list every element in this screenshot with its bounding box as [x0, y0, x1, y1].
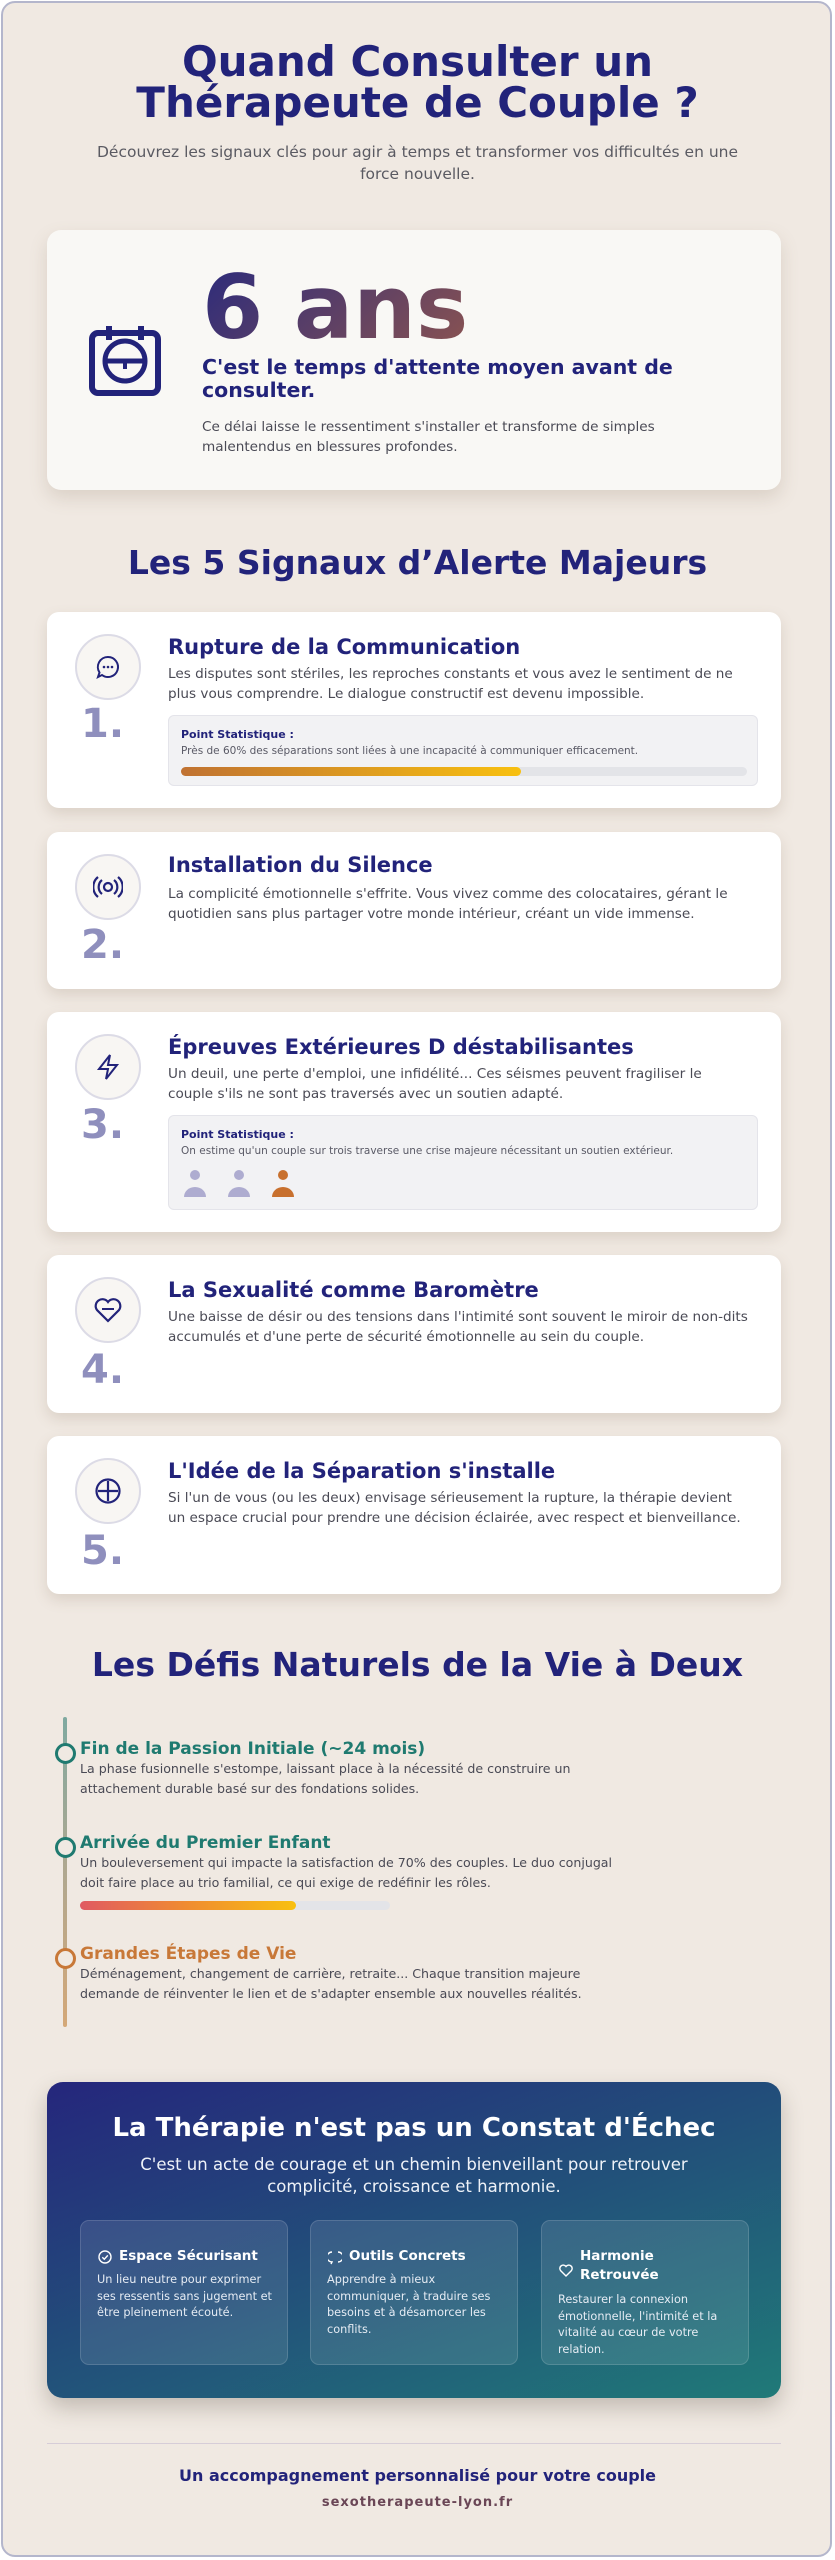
timeline item 1: La phase fusionnelle s'estompe, laissant place à la nécessité de construire un: [80, 1761, 571, 1776]
timeline item 1: [55, 1739, 571, 1796]
card: espace sécurisant: Espace Sécurisant: [119, 2248, 258, 2264]
panel: signal 1: Rupture de la Communication: [168, 635, 520, 659]
subtitle: Découvrez les signaux clés pour agir à temps et transformer vos difficultés en une: [97, 143, 738, 161]
card: outils concrets: conflits.: [327, 2322, 371, 2336]
panel: signal 1: 1.: [81, 701, 124, 747]
stat description: Ce délai laisse le ressentiment s'installer et transforme de simples: [202, 419, 655, 435]
timeline item 3: demande de réinventer le lien et de s'adapter ensemble aux nouvelles réalités.: [80, 1986, 582, 2000]
card: espace sécurisant: ses ressentis sans jugement et: [97, 2290, 272, 2302]
title: [136, 37, 699, 127]
panel: signal 5: [47, 1436, 781, 1594]
panel subtitle: C'est un acte de courage et un chemin bienveillant pour retrouver: [140, 2155, 688, 2174]
stat box with people: [168, 1115, 758, 1210]
card: outils concrets: Apprendre à mieux: [327, 2273, 435, 2286]
icon: lightning: [75, 1034, 141, 1100]
panel subtitle: complicité, croissance et harmonie.: [267, 2177, 561, 2196]
timeline item 1: Fin de la Passion Initiale (~24 mois): [80, 1739, 425, 1759]
panel: signal 3: couple s'ils ne sont pas traversés avec un soutien adapté.: [168, 1086, 563, 1102]
timeline item 1: attachement durable basé sur des fondations solides.: [80, 1780, 419, 1796]
panel: signal 3: 3.: [81, 1102, 124, 1148]
stat description: [202, 419, 655, 455]
card: espace sécurisant: Un lieu neutre pour exprimer: [97, 2273, 261, 2286]
stat box with people: Point Statistique :: [181, 1128, 294, 1141]
panel subtitle: [140, 2155, 688, 2196]
card: outils concrets: communiquer, à traduire ses: [327, 2290, 490, 2302]
card: outils concrets: besoins et à désamorcer les: [327, 2306, 486, 2319]
footer url: sexotherapeute-lyon.fr: [322, 2495, 513, 2510]
timeline item 3: [55, 1943, 582, 2000]
panel: signal 2: 2.: [81, 922, 124, 968]
panel: thérapie: [47, 2082, 781, 2398]
panel: signal 2: quotidien sans plus partager votre monde intérieur, créant un vide immense.: [168, 906, 695, 922]
card: harmonie retrouvée: [541, 2220, 749, 2365]
title: Quand Consulter un: [182, 37, 653, 86]
panel: signal 2: La complicité émotionnelle s'effrite. Vous vivez comme des colocataires, gérant le: [168, 886, 728, 902]
heading: 5 signaux: Les 5 Signaux d’Alerte Majeurs: [128, 543, 707, 582]
stat box with bar: [168, 715, 758, 786]
panel: signal 4: 4.: [81, 1347, 124, 1393]
icon: people 1 of 3: [184, 1170, 294, 1197]
title: Thérapeute de Couple ?: [136, 78, 699, 127]
card: harmonie retrouvée: Harmonie: [580, 2248, 654, 2264]
panel: signal 1: [47, 612, 781, 808]
panel: signal 4: [47, 1255, 781, 1413]
card: harmonie retrouvée: émotionnelle, l'intimité et la: [558, 2310, 717, 2322]
card: harmonie retrouvée: Restaurer la connexion: [558, 2293, 688, 2306]
subtitle: [97, 143, 738, 183]
card: espace sécurisant: être pleinement écouté.: [97, 2306, 233, 2319]
timeline item 2: Un bouleversement qui impacte la satisfaction de 70% des couples. Le duo conjugal: [80, 1855, 612, 1870]
card: outils concrets: Outils Concrets: [349, 2248, 466, 2264]
card: harmonie retrouvée: relation.: [558, 2342, 605, 2356]
stat caption: [202, 355, 673, 402]
panel: signal 1: plus vous comprendre. Le dialogue constructif est devenu impossible.: [168, 686, 644, 702]
card: espace sécurisant: [80, 2220, 288, 2365]
panel: signal 3: Un deuil, une perte d'emploi, une infidélité... Ces séismes peuvent fragiliser le: [168, 1066, 702, 1082]
timeline item 3: Déménagement, changement de carrière, retraite... Chaque transition majeure: [80, 1966, 580, 1981]
panel: signal 5: 5.: [81, 1528, 124, 1574]
panel: signal 1: Les disputes sont stériles, les reproches constants et vous avez le sentiment de ne: [168, 666, 733, 682]
stat box with people: On estime qu'un couple sur trois traverse une crise majeure nécessitant un soutien extérieur.: [181, 1145, 673, 1157]
stat caption: consulter.: [202, 378, 315, 402]
icon: heart: [75, 1277, 141, 1343]
panel: signal 5: Si l'un de vous (ou les deux) envisage sérieusement la rupture, la thérapie devient: [168, 1490, 732, 1506]
panel: stat 6 ans: [47, 230, 781, 490]
card: outils concrets: [310, 2220, 518, 2365]
panel: signal 2: Installation du Silence: [168, 853, 433, 877]
stat caption: C'est le temps d'attente moyen avant de: [202, 355, 673, 379]
panel: signal 5: un espace crucial pour prendre une décision éclairée, avec respect et bienveillance.: [168, 1510, 741, 1526]
big number: 6 ans: [202, 256, 468, 359]
stat box with bar: Point Statistique :: [181, 728, 294, 741]
bar 70%: [80, 1901, 390, 1910]
card: harmonie retrouvée: Retrouvée: [580, 2267, 659, 2283]
icon: chat: [75, 634, 141, 700]
timeline item 3: Grandes Étapes de Vie: [80, 1944, 296, 1964]
panel: signal 4: accumulés et d'une perte de sécurité émotionnelle au sein du couple.: [168, 1328, 644, 1344]
stat description: malentendus en blessures profondes.: [202, 439, 458, 455]
panel title: La Thérapie n'est pas un Constat d'Échec: [112, 2113, 716, 2143]
stat box with bar: Près de 60% des séparations sont liées à une incapacité à communiquer efficacement.: [181, 745, 638, 757]
icon: calendar clock: [89, 326, 161, 396]
heading: défis: Les Défis Naturels de la Vie à Deux: [92, 1645, 743, 1684]
panel: signal 3: Épreuves Extérieures D déstabilisantes: [168, 1035, 634, 1059]
panel: signal 2: [47, 832, 781, 989]
icon: broadcast: [75, 854, 141, 920]
panel: signal 3: [47, 1012, 781, 1232]
timeline item 2: Arrivée du Premier Enfant: [80, 1833, 331, 1853]
card: harmonie retrouvée: vitalité au cœur de votre: [558, 2326, 698, 2339]
subtitle: force nouvelle.: [360, 165, 475, 183]
timeline item 2: [55, 1833, 612, 1910]
timeline item 2: doit faire place au trio familial, ce qui exige de redéfinir les rôles.: [80, 1874, 491, 1890]
panel: signal 4: La Sexualité comme Baromètre: [168, 1278, 539, 1302]
footer: Un accompagnement personnalisé pour votre couple: [179, 2466, 656, 2485]
panel: signal 4: Une baisse de désir ou des tensions dans l'intimité sont souvent le miroir de non-dits: [168, 1309, 748, 1325]
panel: signal 5: L'Idée de la Séparation s'installe: [168, 1459, 555, 1483]
icon: circle plus: [75, 1458, 141, 1524]
timeline: [55, 1717, 612, 2027]
